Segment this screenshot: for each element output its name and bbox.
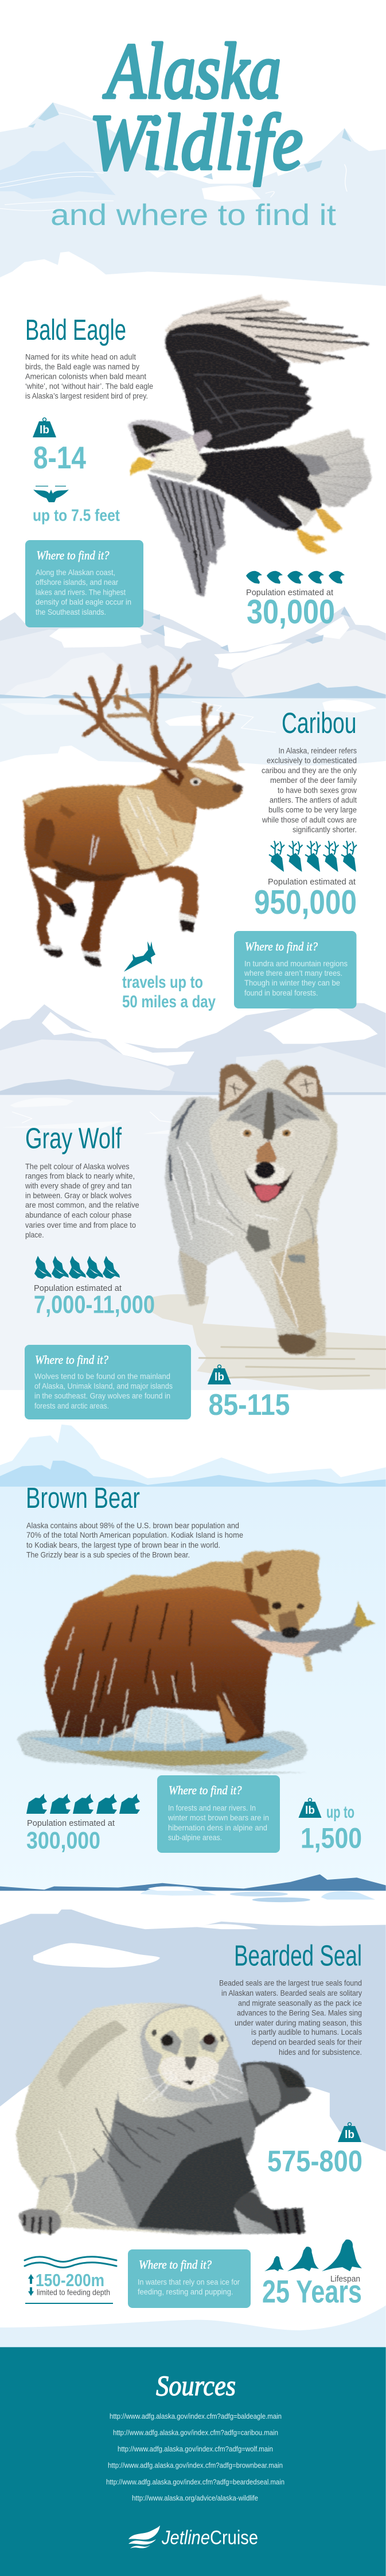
title bbox=[50, 27, 337, 232]
callout: where to find it: hibernation dens in alpine and bbox=[168, 1823, 267, 1832]
callout: where to find it: found in boreal forests. bbox=[244, 988, 318, 997]
description: birds, the Bald eagle was named by bbox=[25, 362, 139, 371]
population icons bbox=[246, 571, 345, 584]
source list bbox=[106, 2412, 284, 2503]
heading: Brown Bear bbox=[26, 1481, 140, 1514]
population label: Population estimated at bbox=[34, 1283, 122, 1293]
description bbox=[25, 1162, 139, 1239]
callout: where to find it bbox=[157, 1775, 280, 1853]
description: and migrate seasonally as the pack ice bbox=[238, 1998, 362, 2007]
logo: JetlineCruise bbox=[128, 2525, 258, 2549]
description: The Grizzly bear is a sub species of the Brown bear. bbox=[26, 1550, 190, 1559]
description: antlers. The antlers of adult bbox=[270, 796, 357, 805]
panel: bald eagle bbox=[25, 294, 372, 631]
description: ranges from black to nearly white, bbox=[25, 1171, 135, 1181]
source list: http://www.adfg.alaska.gov/index.cfm?adfg=baldeagle.main bbox=[110, 2412, 282, 2420]
callout: where to find it: In waters that rely on sea ice for bbox=[138, 2278, 240, 2287]
icon: weight bbox=[33, 418, 56, 437]
description bbox=[26, 1520, 243, 1559]
stat: feeding depth: 150-200m bbox=[36, 2270, 104, 2290]
population icons bbox=[34, 1256, 120, 1279]
description: are most common, and the relative bbox=[25, 1200, 139, 1209]
callout: where to find it: feeding, resting and pupping. bbox=[138, 2287, 233, 2296]
illustration: gray wolf bbox=[147, 1060, 386, 1390]
callout: where to find it bbox=[25, 1345, 191, 1419]
description: The pelt colour of Alaska wolves bbox=[25, 1162, 130, 1171]
description: advances to the Bering Sea. Males sing bbox=[237, 2008, 362, 2018]
panel: wolf background bbox=[0, 1002, 386, 1390]
callout: where to find it: sub-alpine areas. bbox=[168, 1833, 222, 1842]
icon: weight bbox=[298, 1798, 321, 1818]
icon: depth arrows bbox=[28, 2274, 34, 2296]
callout: where to find it: of Alaska, Unimak Island, and major islands bbox=[34, 1381, 173, 1390]
icon: leaping caribou bbox=[124, 941, 155, 972]
description: Alaska contains about 98% of the U.S. brown bear population and bbox=[26, 1520, 239, 1530]
stat: feeding depth bbox=[25, 2270, 113, 2304]
logo: JetlineCruise: JetlineCruise bbox=[161, 2527, 258, 2549]
description: to Kodiak bears, the largest type of brown bear in the world. bbox=[26, 1541, 220, 1550]
icon: weight: lb bbox=[345, 2129, 354, 2141]
description: abundance of each colour phase bbox=[25, 1211, 132, 1220]
source list: http://www.adfg.alaska.gov/index.cfm?adfg=brownbear.main bbox=[108, 2461, 283, 2469]
source list: http://www.adfg.alaska.gov/index.cfm?adfg=beardedseal.main bbox=[106, 2477, 284, 2486]
heading: Caribou bbox=[282, 707, 357, 739]
icon: weight bbox=[338, 2123, 361, 2142]
icon: weight: lb bbox=[40, 424, 49, 436]
title line: Alaska: Alaska bbox=[103, 27, 281, 115]
description: depend on bearded seals for their bbox=[252, 2037, 362, 2046]
callout: where to find it bbox=[234, 931, 357, 1008]
population number: 950,000 bbox=[254, 883, 357, 921]
description: exclusively to domesticated bbox=[267, 756, 357, 765]
panel: gray wolf bbox=[25, 1060, 386, 1422]
description: significantly shorter. bbox=[293, 825, 357, 834]
description: bulls come to be very large bbox=[268, 805, 357, 814]
stat: travel distance: 50 miles a day bbox=[122, 992, 216, 1011]
callout: where to find it: In forests and near rivers. In bbox=[168, 1803, 256, 1813]
population number: 7,000-11,000 bbox=[34, 1290, 155, 1319]
description bbox=[25, 352, 153, 401]
callout: where to find it: lakes and rivers. The highest bbox=[36, 588, 126, 597]
icon: water waves bbox=[25, 2257, 116, 2267]
panel: sources bbox=[106, 2369, 284, 2549]
stat: feeding depth: limited to feeding depth bbox=[37, 2287, 110, 2296]
callout: where to find it: in the southeast. Gray wolves are found in bbox=[34, 1391, 170, 1400]
heading: Sources bbox=[156, 2369, 236, 2402]
callout: where to find it: winter most brown bears are in bbox=[167, 1813, 269, 1822]
description: hides and for subsistence. bbox=[279, 2047, 362, 2057]
description: ‘white’, not ‘without hair’. The bald eagle bbox=[25, 381, 153, 390]
description bbox=[262, 746, 357, 834]
description: with every shade of grey and tan bbox=[25, 1181, 131, 1190]
stat: weight: 1,500 bbox=[301, 1822, 362, 1855]
panel: sources band background bbox=[0, 2306, 386, 2576]
description: to have both sexes grow bbox=[278, 785, 357, 794]
panel: brown bear bbox=[17, 1481, 375, 1855]
illustration: caribou bbox=[24, 659, 245, 967]
description: Beaded seals are the largest true seals found bbox=[219, 1978, 362, 1987]
callout: where to find it: Where to find it? bbox=[139, 2258, 212, 2272]
illustration: brown bear with salmon bbox=[17, 1550, 375, 1775]
description: while those of adult cows are bbox=[262, 815, 357, 824]
callout: where to find it: Along the Alaskan coast, bbox=[36, 568, 115, 577]
population icons bbox=[26, 1794, 140, 1814]
description: American colonists when bald meant bbox=[25, 372, 146, 381]
heading: Gray Wolf bbox=[25, 1122, 122, 1154]
source list: http://www.alaska.org/advice/alaska-wildlife bbox=[132, 2494, 258, 2503]
description bbox=[219, 1978, 362, 2057]
stat: travel distance: travels up to bbox=[122, 973, 203, 992]
description: is Alaska’s largest resident bird of prey. bbox=[25, 391, 148, 401]
callout: where to find it: density of bald eagle occur in bbox=[36, 597, 131, 606]
callout: where to find it: offshore islands, and near bbox=[36, 577, 118, 587]
population label: Population estimated at bbox=[27, 1818, 115, 1828]
population number: 30,000 bbox=[247, 593, 335, 631]
description: under water during mating season, this bbox=[235, 2018, 362, 2027]
description: 70% of the total North American population. Kodiak Island is home bbox=[26, 1530, 243, 1539]
callout: where to find it: Where to find it? bbox=[245, 940, 318, 953]
panel: seal background bbox=[0, 1874, 386, 2151]
callout: where to find it bbox=[128, 2249, 251, 2308]
population icons bbox=[269, 841, 357, 872]
lifespan icons bbox=[264, 2240, 362, 2271]
description: in between. Gray or black wolves bbox=[25, 1190, 132, 1200]
stat: travel distance bbox=[122, 973, 216, 1011]
icon: weight: lb bbox=[305, 1805, 315, 1817]
callout: where to find it: the Southeast islands. bbox=[36, 607, 106, 616]
callout: where to find it: Where to find it? bbox=[37, 549, 110, 562]
description: Named for its white head on adult bbox=[25, 352, 136, 362]
illustration: bald eagle bbox=[128, 294, 372, 597]
icon: wingspan bbox=[33, 486, 69, 502]
icon: weight: lb bbox=[215, 1371, 224, 1383]
callout: where to find it: where there aren’t many trees. bbox=[244, 968, 342, 977]
stat: wingspan: up to 7.5 feet bbox=[33, 506, 120, 525]
description: in Alaskan waters. Bearded seals are solitary bbox=[221, 1988, 362, 1997]
panel: bear background bbox=[0, 1425, 386, 1891]
stat: weight: 8-14 bbox=[33, 440, 86, 475]
callout: where to find it: Where to find it? bbox=[169, 1783, 242, 1797]
source list: http://www.adfg.alaska.gov/index.cfm?adfg=wolf.main bbox=[118, 2445, 273, 2453]
subtitle: and where to find it bbox=[50, 199, 337, 232]
header mountains bbox=[0, 102, 386, 286]
description: caribou and they are the only bbox=[262, 766, 357, 775]
icon: weight bbox=[208, 1365, 231, 1384]
stat: weight: up to bbox=[326, 1803, 354, 1822]
description: place. bbox=[25, 1230, 44, 1239]
lifespan label: Lifespan bbox=[330, 2274, 360, 2284]
population label: Population estimated at bbox=[246, 588, 334, 598]
callout: where to find it bbox=[25, 540, 143, 627]
stat: weight: 575-800 bbox=[267, 2145, 362, 2178]
description: is partly audible to humans. Locals bbox=[251, 2027, 362, 2036]
illustration: bearded seal bbox=[16, 2003, 311, 2234]
source list: http://www.adfg.alaska.gov/index.cfm?adfg=caribou.main bbox=[113, 2428, 278, 2437]
population number: 300,000 bbox=[26, 1827, 100, 1854]
panel: caribou background bbox=[0, 607, 386, 766]
panel: caribou bbox=[24, 659, 357, 1011]
callout: where to find it: Though in winter they can be bbox=[244, 978, 340, 987]
description: In Alaska, reindeer refers bbox=[279, 746, 357, 755]
population label: Population estimated at bbox=[268, 877, 356, 887]
callout: where to find it: forests and arctic areas. bbox=[34, 1401, 109, 1410]
title line: Wildlife: Wildlife bbox=[89, 98, 303, 186]
stat: weight: 85-115 bbox=[209, 1388, 290, 1422]
stat: weight bbox=[301, 1803, 362, 1855]
heading: Bald Eagle bbox=[25, 313, 126, 346]
callout: where to find it: In tundra and mountain regions bbox=[244, 959, 348, 968]
description: varies over time and from place to bbox=[25, 1220, 136, 1229]
description: member of the deer family bbox=[270, 775, 357, 785]
panel: bearded seal bbox=[16, 1939, 362, 2310]
callout: where to find it: Where to find it? bbox=[35, 1353, 108, 1367]
callout: where to find it: Wolves tend to be found on the mainland bbox=[34, 1372, 170, 1381]
